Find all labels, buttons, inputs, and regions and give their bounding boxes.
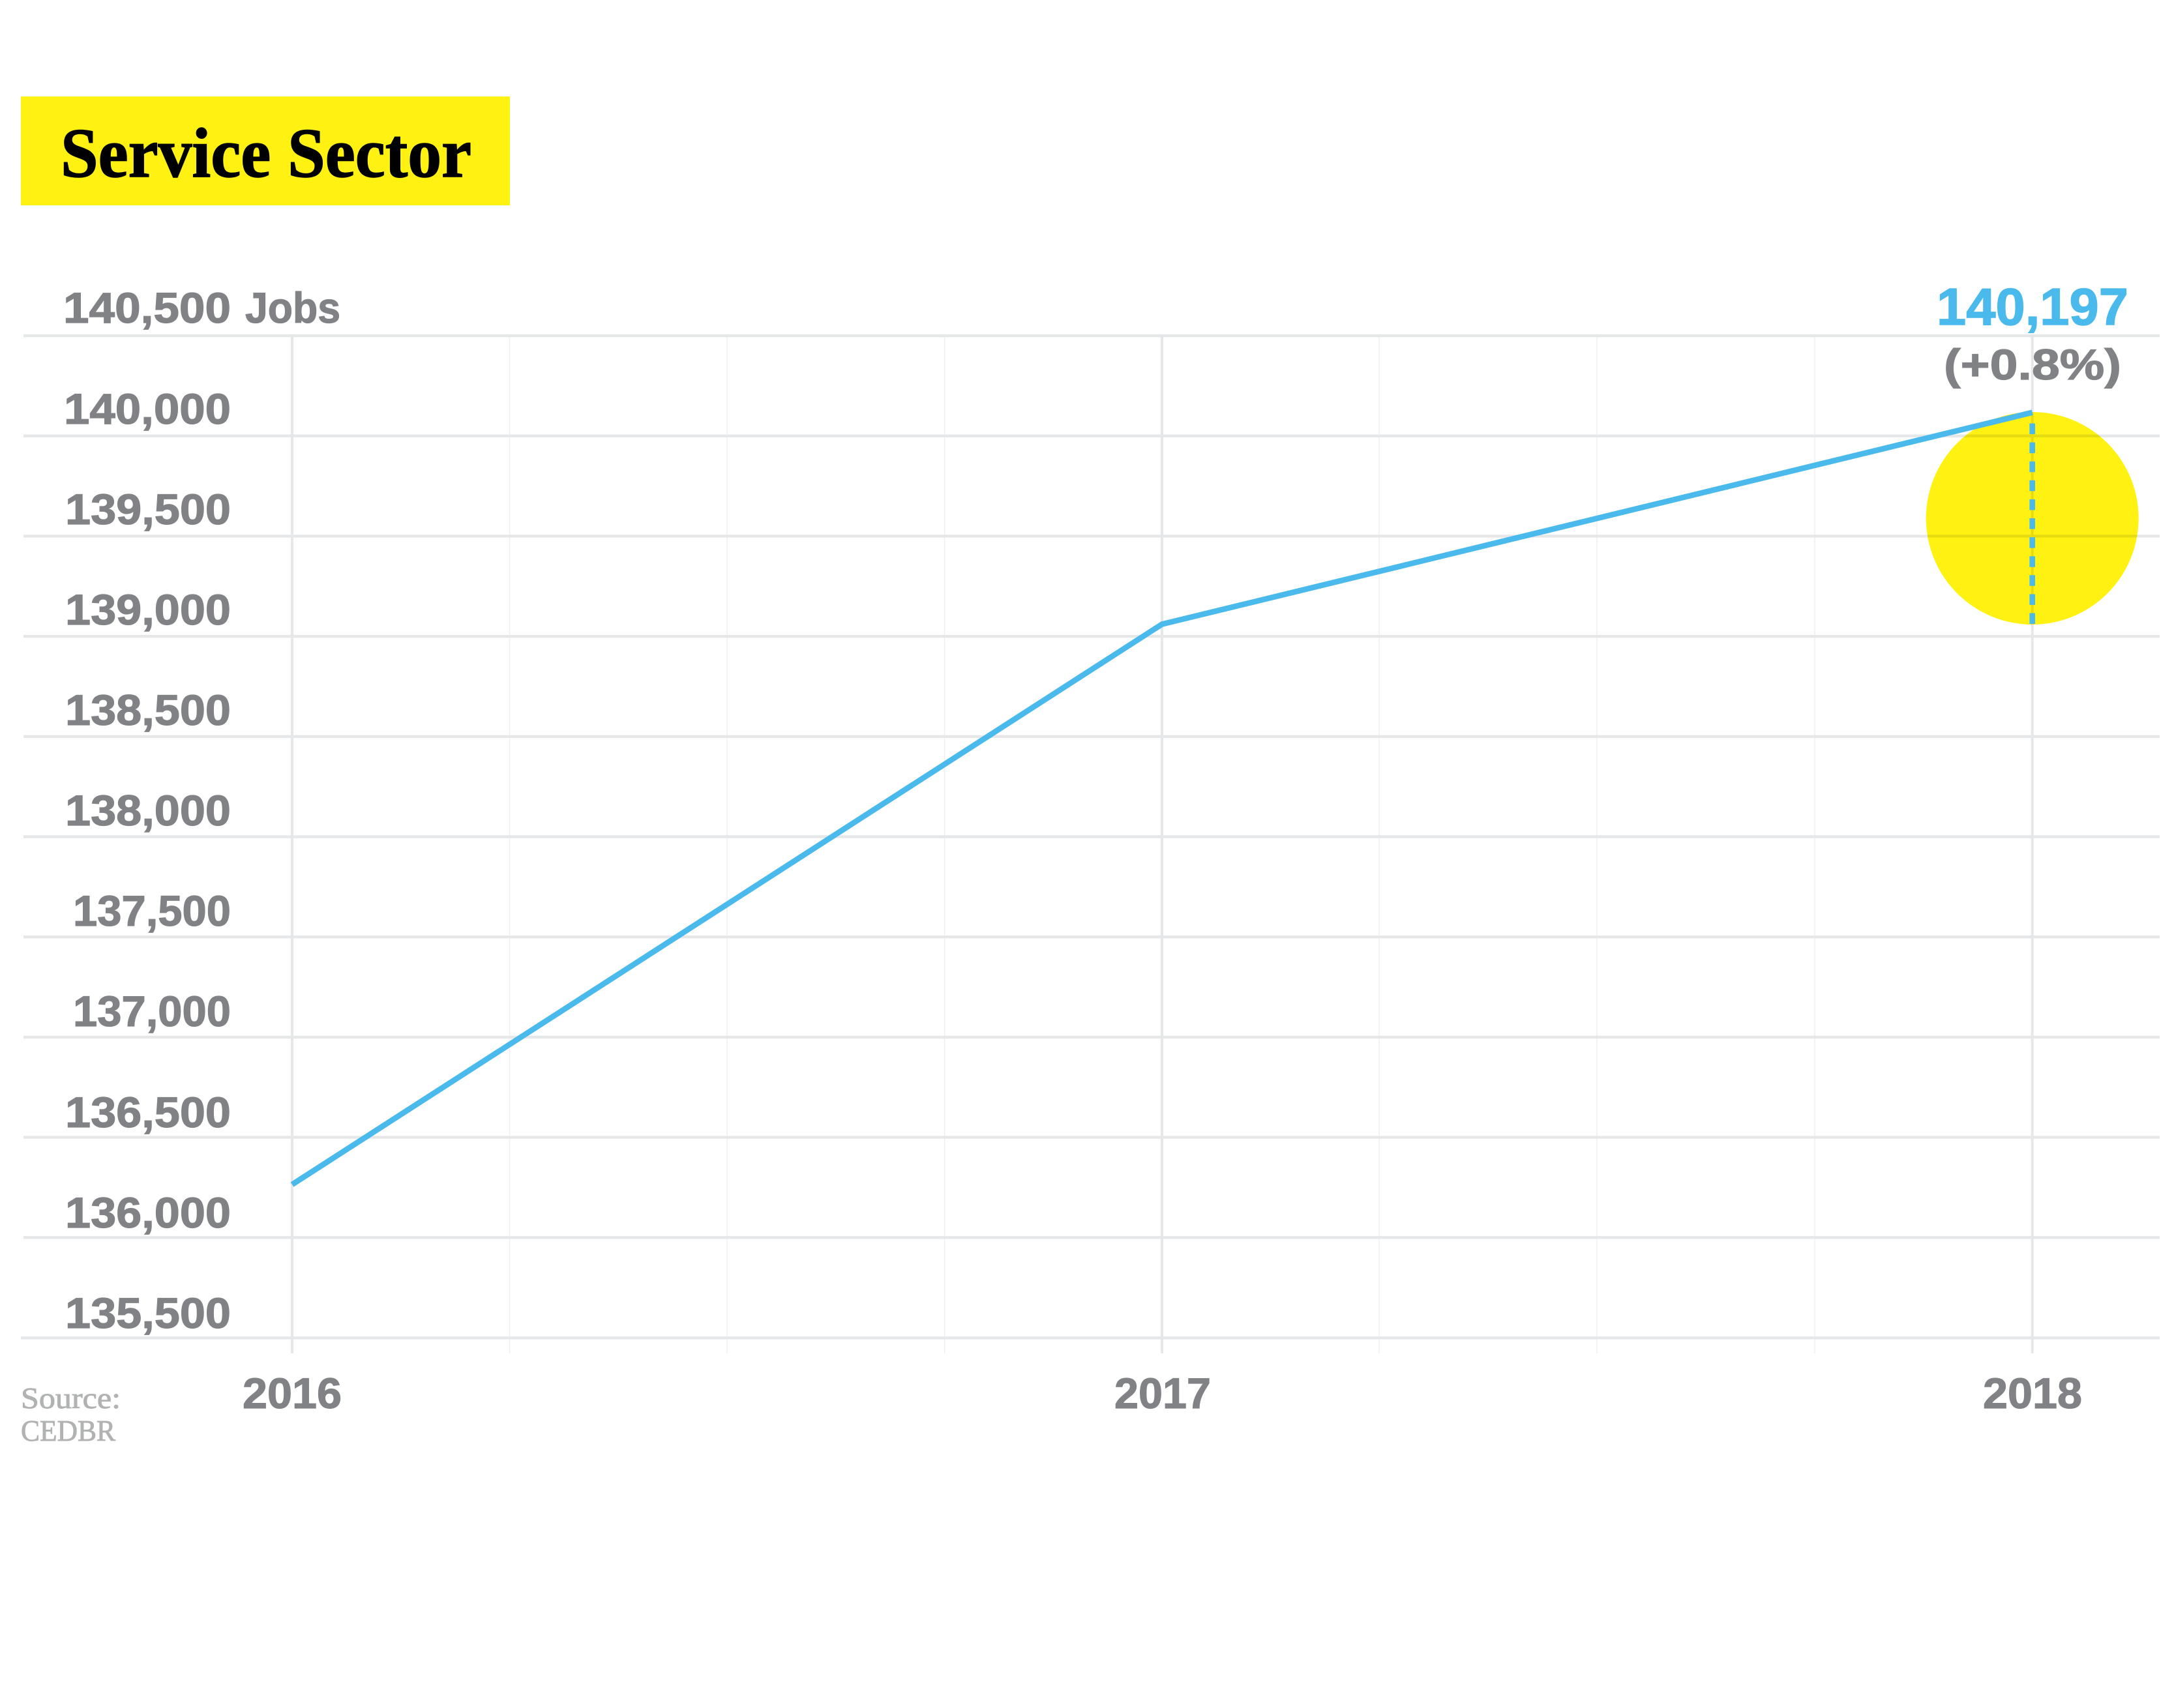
chart grid	[21, 336, 2160, 1353]
highlight circle	[1926, 412, 2139, 625]
y axis labels: 137,500	[73, 887, 231, 935]
y axis labels: 136,000	[65, 1188, 231, 1237]
callout: 2018 value: (+0.8%)	[1944, 340, 2121, 389]
y axis labels: 135,500	[65, 1289, 231, 1337]
line series: service sector jobs	[292, 413, 2033, 1185]
x axis year labels: 2018	[1983, 1369, 2082, 1417]
y axis labels: 140,500	[63, 284, 231, 332]
x axis year labels: 2016	[243, 1369, 342, 1417]
callout: 2018 value	[1937, 278, 2128, 389]
y axis labels	[63, 284, 340, 1337]
y axis labels: 138,000	[65, 786, 231, 834]
x axis year labels: 2017	[1114, 1369, 1211, 1417]
y axis labels: 137,000	[73, 987, 231, 1035]
y axis labels: 136,500	[65, 1088, 231, 1136]
x axis year labels	[243, 1369, 2082, 1417]
dashed drop line for 2018	[2029, 424, 2035, 625]
source note: Source:	[21, 1381, 121, 1415]
title banner	[21, 96, 510, 205]
source note	[21, 1381, 121, 1447]
source note: CEDBR	[21, 1414, 115, 1447]
title banner: Service Sector	[61, 115, 471, 192]
y axis labels: 138,500	[65, 686, 231, 734]
y axis labels: 139,500	[65, 485, 231, 533]
callout: 2018 value: 140,197	[1937, 278, 2128, 336]
y axis labels: Jobs	[245, 284, 340, 332]
y axis labels: 139,000	[65, 585, 231, 634]
y axis labels: 140,000	[64, 385, 231, 433]
